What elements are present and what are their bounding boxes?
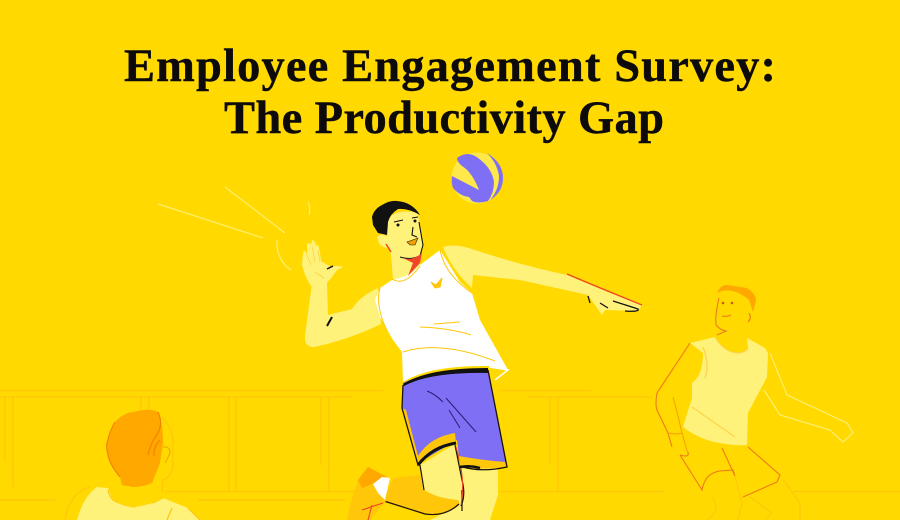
sock bbox=[373, 477, 390, 500]
ear bbox=[163, 447, 170, 463]
shorts outline bbox=[680, 447, 780, 497]
check logo bbox=[431, 278, 442, 288]
main player bbox=[302, 201, 642, 520]
waistband bbox=[403, 368, 488, 386]
gold wedge bbox=[452, 160, 479, 190]
jersey bbox=[375, 250, 508, 382]
right arm bbox=[764, 353, 853, 442]
motion lines bbox=[158, 187, 310, 270]
purple crescent bbox=[487, 153, 503, 200]
neck bbox=[387, 240, 421, 283]
title bbox=[124, 41, 776, 144]
shorts trim bbox=[402, 408, 507, 469]
background player: right bbox=[656, 285, 853, 520]
purple band bbox=[452, 154, 494, 202]
title: Employee Engagement Survey: bbox=[124, 41, 776, 92]
shorts bbox=[402, 371, 507, 468]
left arm bbox=[657, 343, 692, 455]
legs outline bbox=[707, 477, 800, 520]
hair bbox=[717, 285, 756, 312]
background: gym railing bbox=[0, 390, 900, 500]
thigh bbox=[420, 444, 463, 512]
shirt bbox=[77, 487, 200, 520]
face bbox=[387, 212, 423, 257]
right leg bbox=[430, 467, 498, 520]
head outline bbox=[162, 417, 173, 492]
neck bbox=[108, 484, 163, 507]
hair bbox=[372, 201, 420, 235]
right arm bbox=[443, 246, 642, 315]
elbow mark bbox=[327, 317, 332, 326]
ear bbox=[377, 235, 390, 248]
shoe bbox=[347, 467, 387, 520]
shirt bbox=[683, 337, 768, 445]
background player: left, back of head bbox=[65, 410, 200, 520]
title: The Productivity Gap bbox=[224, 93, 664, 144]
hand bbox=[302, 240, 343, 286]
raised arm bbox=[305, 283, 381, 347]
hair bbox=[107, 410, 163, 487]
face and neck bbox=[715, 300, 750, 338]
jersey hem corner bbox=[489, 367, 508, 380]
facial features bbox=[394, 217, 423, 259]
folded lower leg bbox=[383, 475, 459, 514]
icon: volleyball bbox=[452, 152, 503, 204]
